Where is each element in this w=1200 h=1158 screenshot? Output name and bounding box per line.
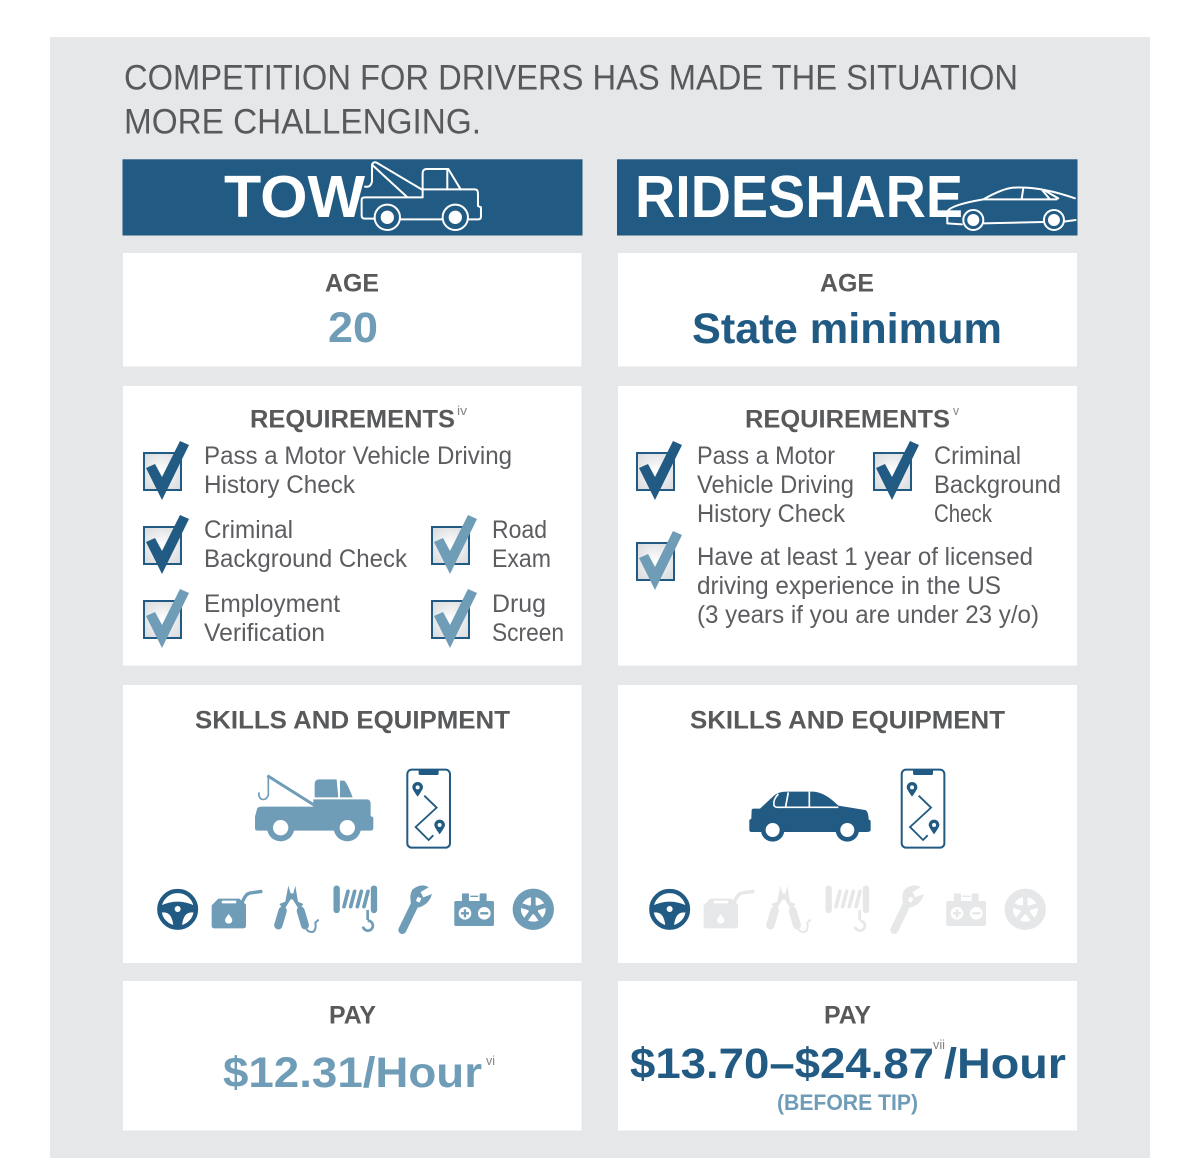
panel: tow pay [123, 981, 582, 1130]
panel: rideshare skills and equipment: SKILLS AND EQUIPMENT [690, 706, 1005, 734]
panel: rideshare pay [618, 981, 1077, 1130]
panel: rideshare pay: PAY [824, 1002, 871, 1030]
requirement: criminal background [874, 441, 1061, 528]
panel: tow age: AGE [325, 270, 379, 298]
title: MORE CHALLENGING. [124, 102, 481, 142]
header: rideshare [617, 159, 1078, 236]
icon: winch, inactive [829, 889, 866, 931]
icon: phone with map route [902, 770, 944, 848]
panel: rideshare skills and equipment [618, 685, 1077, 963]
icon: jumper cables [278, 886, 319, 932]
requirement: road exam: Road [492, 516, 547, 544]
panel: tow age [123, 253, 582, 366]
panel: tow requirements: REQUIREMENTS [250, 406, 455, 434]
requirement: criminal background: Criminal [204, 516, 293, 544]
requirement: driving history: History Check [697, 500, 845, 528]
panel: tow pay: vi [486, 1053, 495, 1068]
requirement: drug screen: Screen [492, 619, 564, 647]
icon: wrench, inactive [894, 885, 924, 930]
requirement: driving history [144, 441, 512, 500]
icon: steering wheel [159, 891, 196, 928]
title: COMPETITION FOR DRIVERS HAS MADE THE SITUATION [124, 58, 1018, 98]
requirement: criminal background [144, 515, 407, 574]
requirement: criminal background: Background [934, 471, 1061, 499]
requirement: criminal background: Criminal [934, 442, 1021, 470]
icon: tow truck [255, 776, 373, 841]
panel: rideshare pay: (BEFORE TIP) [777, 1090, 918, 1115]
panel: rideshare requirements: v [953, 403, 959, 418]
header: tow [122, 159, 582, 236]
icon: tire [513, 889, 554, 930]
requirement: drug screen: Drug [492, 590, 546, 618]
requirement: licensed experience [637, 531, 1039, 629]
icon: winch [337, 889, 374, 931]
header: rideshare: RIDESHARE [635, 164, 963, 230]
requirement: driving history: Pass a Motor [697, 442, 835, 470]
requirement: road exam [432, 515, 551, 574]
icon: car [749, 792, 871, 842]
requirement: driving history: Vehicle Driving [697, 471, 854, 499]
requirement: driving history: Pass a Motor Vehicle Driving [204, 442, 512, 470]
requirement: employment: Employment [204, 590, 340, 618]
requirement: driving history [637, 441, 854, 528]
panel: tow age: 20 [328, 304, 378, 352]
requirement: employment: Verification [204, 619, 325, 647]
requirement: criminal background: Background Check [204, 545, 407, 573]
panel: rideshare pay: vii [933, 1037, 945, 1052]
icon: battery, inactive [946, 893, 986, 926]
panel: rideshare age: State minimum [692, 305, 1002, 353]
panel: rideshare requirements: REQUIREMENTS [745, 406, 950, 434]
icon: tire, inactive [1005, 889, 1046, 930]
icon: wrench [402, 885, 432, 930]
requirement: licensed experience: Have at least 1 year of licensed [697, 543, 1033, 571]
panel: rideshare age: AGE [820, 270, 874, 298]
panel: rideshare age [618, 253, 1077, 366]
requirement: licensed experience: driving experience in the US [697, 572, 1001, 600]
requirement: employment [144, 589, 340, 648]
icon: battery [454, 893, 494, 926]
panel: rideshare pay: /Hour [944, 1040, 1066, 1088]
icon: fuel can [212, 891, 262, 928]
requirement: driving history: History Check [204, 471, 355, 499]
icon: jumper cables, inactive [770, 886, 811, 932]
panel: tow pay: $12.31/Hour [223, 1049, 482, 1097]
panel: rideshare requirements [618, 386, 1077, 666]
panel: tow requirements [123, 386, 582, 666]
panel: tow skills and equipment [123, 685, 582, 963]
icon: phone with map route [407, 770, 450, 848]
icon: steering wheel [651, 891, 688, 928]
header: tow: TOW [224, 164, 365, 230]
panel: tow pay: PAY [329, 1002, 376, 1030]
panel: tow requirements: iv [457, 403, 468, 418]
requirement: drug screen [432, 589, 564, 648]
icon: car outline [947, 187, 1076, 230]
requirement: criminal background: Check [934, 500, 992, 528]
panel: tow skills and equipment: SKILLS AND EQUIPMENT [195, 706, 510, 734]
icon: fuel can, inactive [704, 891, 754, 928]
icon: tow truck outline [362, 162, 481, 230]
requirement: licensed experience: (3 years if you are under 23 y/o) [697, 601, 1039, 629]
panel: rideshare pay: $13.70–$24.87 [630, 1040, 934, 1088]
requirement: road exam: Exam [492, 545, 551, 573]
title [124, 58, 1018, 142]
